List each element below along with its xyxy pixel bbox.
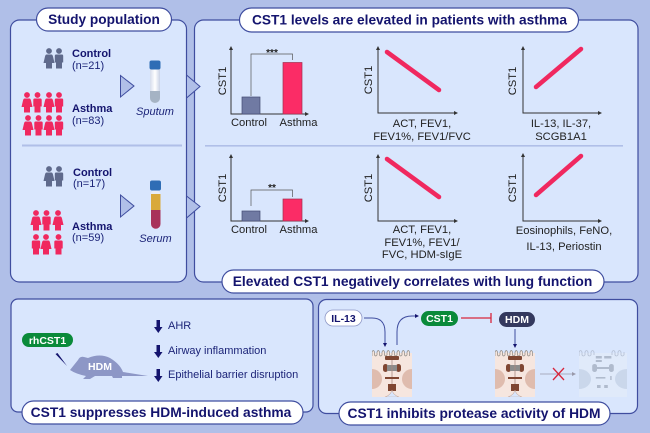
arrow: HDM to cell bbox=[513, 329, 517, 348]
panel: study population bbox=[10, 8, 186, 282]
heading: CST1 levels elevated bbox=[240, 8, 578, 32]
label: sputum: Sputum bbox=[136, 106, 174, 118]
pill: rhCST1 bbox=[22, 333, 73, 347]
icons: control group sputum bbox=[44, 48, 63, 68]
arrow: cell to CST1 bbox=[397, 314, 419, 345]
bar chart: serum: Control bbox=[231, 224, 267, 236]
heading: study population bbox=[36, 8, 172, 31]
arrow: to sputum bbox=[120, 76, 134, 97]
icon: epithelial cell 1 bbox=[362, 350, 422, 397]
line chart: serum negative: ACT, FEV1, bbox=[393, 224, 451, 236]
bar chart: sputum bbox=[217, 46, 318, 129]
bar chart: sputum: CST1 bbox=[217, 67, 229, 95]
line chart: serum negative: CST1 bbox=[363, 174, 375, 202]
text: control n=21: (n=21) bbox=[72, 60, 104, 72]
bar chart: sputum: *** bbox=[266, 48, 278, 59]
pill: IL-13: IL-13 bbox=[331, 313, 356, 325]
text: asthma n=83 bbox=[72, 103, 113, 127]
arrow: IL-13 to cell bbox=[364, 318, 387, 347]
line chart: serum positive: Eosinophils, FeNO, bbox=[516, 225, 612, 237]
bar chart: serum: CST1 bbox=[217, 174, 229, 202]
pill: CST1 bbox=[421, 311, 458, 326]
heading: CST1 suppresses: CST1 suppresses HDM-induced asthma bbox=[31, 405, 292, 420]
icons: asthma group serum bbox=[30, 210, 64, 254]
line chart: sputum positive: IL-13, IL-37, bbox=[531, 118, 591, 130]
arrow: into top row bbox=[186, 75, 200, 98]
arrow: to serum bbox=[120, 195, 134, 217]
icons: control group serum bbox=[44, 166, 63, 186]
heading: CST1 inhibits bbox=[339, 402, 610, 425]
line chart: sputum negative: FEV1%, FEV1/FVC bbox=[373, 131, 471, 143]
line chart: sputum negative: ACT, FEV1, bbox=[393, 118, 451, 130]
line chart: serum positive bbox=[507, 153, 612, 253]
heading: negative correlation bbox=[222, 270, 604, 293]
pill: IL-13 bbox=[325, 310, 362, 326]
line chart: serum negative: FVC, HDM-sIgE bbox=[382, 249, 462, 261]
pill: HDM bbox=[499, 312, 535, 327]
bar chart: serum bbox=[217, 154, 318, 236]
icons: asthma group sputum bbox=[22, 92, 63, 136]
list: effects: Airway inflammation bbox=[168, 345, 266, 357]
icon: sputum tube bbox=[150, 60, 160, 103]
icon: mouse HDM bbox=[70, 356, 148, 379]
list: effects: Epithelial barrier disruption bbox=[168, 369, 298, 381]
line chart: sputum negative: CST1 bbox=[363, 66, 375, 94]
text: asthma n=59: (n=59) bbox=[72, 232, 104, 244]
line chart: sputum positive: SCGB1A1 bbox=[535, 131, 587, 143]
bar chart: serum: Asthma bbox=[280, 224, 318, 236]
text: asthma n=59: Asthma bbox=[72, 221, 113, 233]
pill: HDM: HDM bbox=[505, 314, 529, 326]
line chart: serum positive: IL-13, Periostin bbox=[526, 241, 602, 253]
line chart: serum positive: CST1 bbox=[507, 174, 519, 202]
panel: CST1 levels bbox=[186, 8, 638, 293]
heading: study population: Study population bbox=[48, 12, 160, 27]
list: effects bbox=[154, 320, 298, 382]
text: control n=17: Control bbox=[73, 167, 112, 179]
pill: rhCST1: rhCST1 bbox=[29, 335, 66, 347]
heading: negative correlation: Elevated CST1 negatively correlates with lung function bbox=[233, 274, 592, 289]
panel: CST1 suppresses asthma bbox=[11, 299, 313, 424]
line chart: serum negative: FEV1%, FEV1/ bbox=[384, 237, 461, 249]
icon: mouse HDM: HDM bbox=[88, 361, 112, 373]
label: serum: Serum bbox=[139, 233, 172, 245]
arrow: into bottom row bbox=[186, 196, 200, 218]
line chart: sputum positive bbox=[507, 46, 602, 143]
icon: disrupted cell bbox=[567, 350, 639, 397]
list: effects: AHR bbox=[168, 320, 191, 332]
text: asthma n=83: (n=83) bbox=[72, 115, 104, 127]
text: control n=21 bbox=[72, 48, 111, 72]
bar chart: sputum: Control bbox=[231, 117, 267, 129]
text: control n=21: Control bbox=[72, 48, 111, 60]
panel: CST1 inhibits protease bbox=[318, 300, 639, 425]
icon: epithelial cell 2 bbox=[485, 350, 545, 397]
icon: injection bbox=[56, 353, 67, 366]
text: control n=17 bbox=[73, 167, 112, 190]
heading: CST1 levels elevated: CST1 levels are elevated in patients with asthma bbox=[252, 12, 567, 28]
text: control n=17: (n=17) bbox=[73, 178, 105, 190]
pill: CST1: CST1 bbox=[426, 313, 453, 325]
bar chart: sputum: Asthma bbox=[280, 117, 318, 129]
text: asthma n=83: Asthma bbox=[72, 103, 113, 115]
heading: CST1 inhibits: CST1 inhibits protease activity of HDM bbox=[348, 406, 600, 421]
heading: CST1 suppresses bbox=[22, 401, 303, 424]
inhibition line bbox=[461, 313, 491, 323]
blocked arrow bbox=[540, 368, 576, 380]
line chart: sputum positive: CST1 bbox=[507, 67, 519, 95]
text: asthma n=59 bbox=[72, 221, 113, 244]
bar chart: serum: ** bbox=[268, 183, 276, 194]
icon: serum tube bbox=[150, 180, 161, 229]
line chart: sputum negative bbox=[363, 46, 471, 143]
line chart: serum negative bbox=[363, 154, 462, 261]
